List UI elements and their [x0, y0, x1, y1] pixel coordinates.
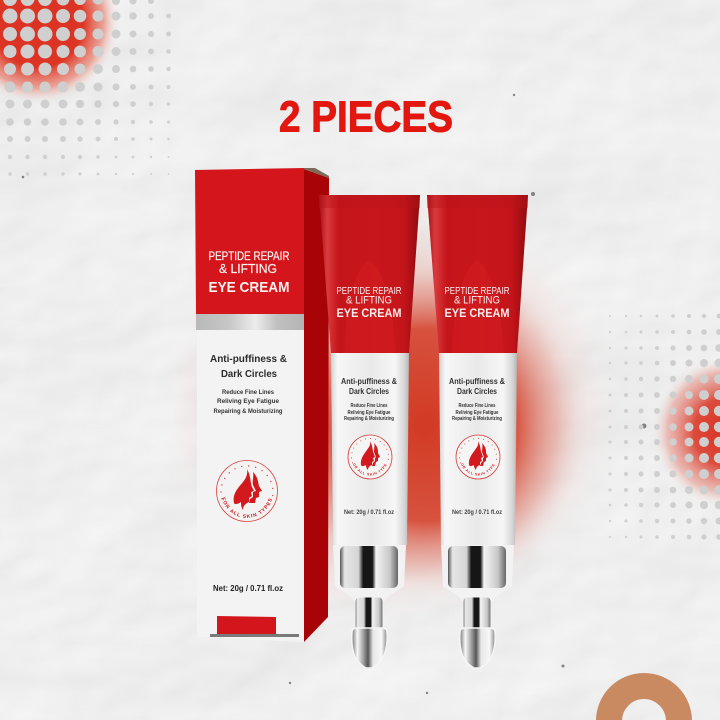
box subtitle [210, 353, 287, 380]
tube net weight: Net: 20g / 0.71 fl.oz [452, 509, 502, 516]
box logo [216, 460, 278, 522]
tube subtitle [449, 376, 505, 396]
tube heading: & LIFTING [454, 294, 500, 306]
tube tip [460, 628, 495, 668]
tube benefits list: Reduce Fine Lines [458, 403, 496, 409]
tube tip [352, 628, 387, 668]
red glow behind products [150, 190, 630, 630]
left tube [319, 195, 420, 668]
box benefits list [214, 389, 283, 415]
tube bright lower centre [452, 260, 504, 353]
box heading: & LIFTING [219, 261, 277, 276]
tube subtitle: Anti-puffiness & [449, 376, 505, 386]
tube net weight: Net: 20g / 0.71 fl.oz [344, 509, 394, 516]
box heading [208, 251, 290, 296]
bottom-right copper ring [609, 686, 679, 720]
top-left halftone accent [0, 0, 171, 176]
tube body white [439, 352, 517, 545]
box benefits list: Reliving Eye Fatigue [217, 398, 279, 405]
tube subtitle [341, 376, 397, 396]
box white front panel [197, 330, 304, 642]
tube subtitle: Dark Circles [457, 386, 497, 396]
box net weight: Net: 20g / 0.71 fl.oz [213, 583, 283, 593]
tube benefits list: Repairing & Moisturizing [452, 416, 502, 422]
box bottom slot [210, 634, 299, 637]
tube logo: FOR ALL SKIN TYPES [353, 463, 387, 476]
tube logo: FOR ALL SKIN TYPES [461, 463, 495, 476]
tube heading: EYE CREAM [336, 306, 402, 320]
tube subtitle: Anti-puffiness & [341, 376, 397, 386]
tube subtitle: Dark Circles [349, 386, 389, 396]
tube heading [336, 285, 402, 320]
tube heading: & LIFTING [346, 294, 392, 306]
box benefits list: Reduce Fine Lines [222, 389, 274, 396]
box bottom tab [217, 616, 276, 636]
tube body red [319, 195, 420, 353]
tube crimp [427, 195, 528, 208]
tube heading: PEPTIDE REPAIR [336, 285, 402, 297]
tube benefits list [344, 403, 394, 422]
tube heading [444, 285, 510, 320]
box subtitle: Anti-puffiness & [210, 353, 287, 365]
tube benefits list: Reliving Eye Fatigue [456, 410, 499, 416]
tube heading: EYE CREAM [444, 306, 510, 320]
box side panel [304, 169, 329, 642]
tube crimp [319, 195, 420, 208]
box heading: EYE CREAM [208, 279, 290, 296]
tube nozzle [463, 597, 491, 630]
tube logo [456, 434, 500, 480]
tube benefits list [452, 403, 502, 422]
right tube [427, 195, 528, 668]
tube collar [441, 545, 514, 601]
tube body white [331, 352, 409, 545]
box subtitle: Dark Circles [221, 368, 277, 380]
box benefits list: Repairing & Moisturizing [214, 408, 283, 415]
tube nozzle [355, 597, 383, 630]
tube benefits list: Reduce Fine Lines [350, 403, 388, 409]
product box [195, 168, 329, 642]
tube bright lower centre [344, 260, 396, 353]
box red front panel [195, 168, 304, 316]
tube heading: PEPTIDE REPAIR [444, 285, 510, 297]
box silver band [196, 314, 304, 330]
right halftone accent [608, 314, 720, 540]
tube benefits list: Reliving Eye Fatigue [348, 410, 391, 416]
box logo: FOR ALL SKIN TYPES [222, 497, 272, 518]
box top flap edge [304, 168, 329, 178]
tube logo [348, 434, 392, 480]
tube body red [427, 195, 528, 353]
tube collar [333, 545, 406, 601]
box heading: PEPTIDE REPAIR [208, 251, 290, 263]
title: 2 PIECES [279, 92, 453, 142]
tube benefits list: Repairing & Moisturizing [344, 416, 394, 422]
